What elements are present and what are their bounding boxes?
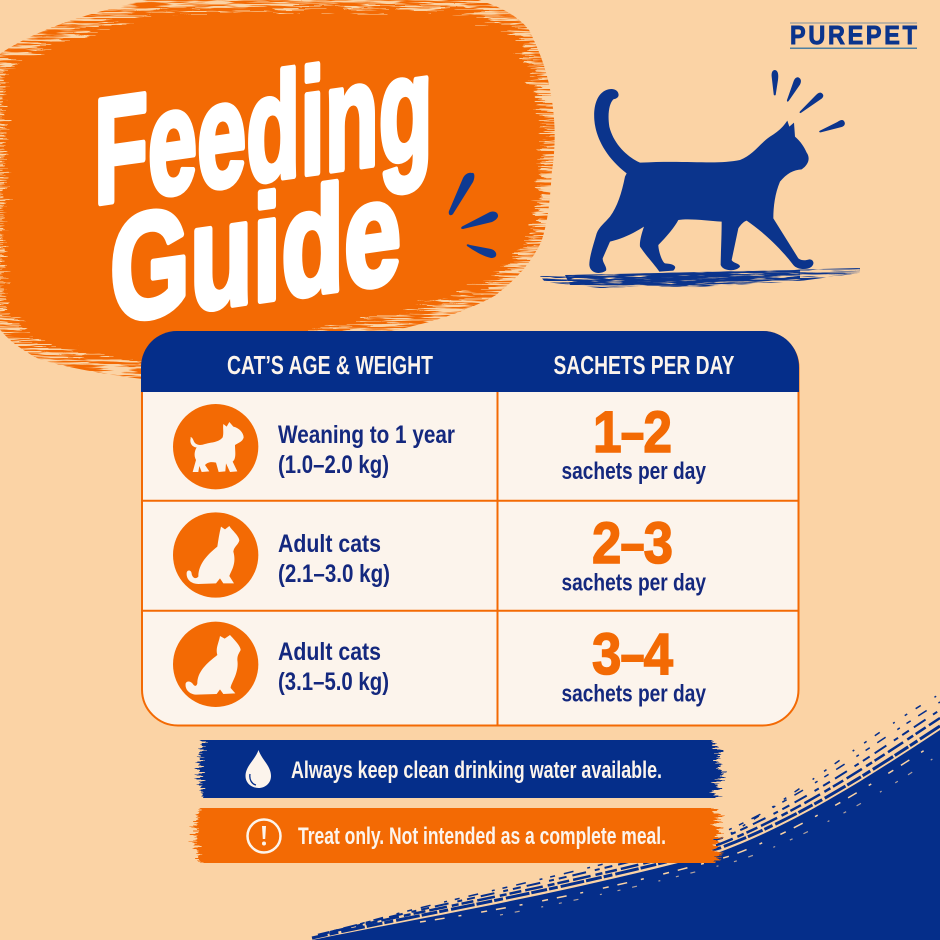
row 3 label: Adult cats — [278, 638, 381, 666]
row 1 weight: (1.0–2.0 kg) — [278, 451, 389, 479]
logo: PUREPET: PUREPET — [790, 22, 917, 50]
row 3 weight: (3.1–5.0 kg) — [278, 668, 389, 696]
icon: walking cat silhouette — [589, 70, 845, 273]
brush stroke: orange title background — [0, 5, 545, 369]
ground scratch under cat — [540, 268, 860, 288]
icon: sitting cat — [173, 512, 258, 598]
banner: treat warning — [196, 808, 718, 863]
row 1 label: Weaning to 1 year — [278, 421, 455, 449]
table body — [142, 332, 798, 726]
icon: kitten — [173, 404, 258, 489]
row 1 amount: 1 — [593, 400, 625, 465]
row 2 label: Adult cats — [278, 530, 381, 558]
table grid lines — [142, 392, 798, 725]
row 2 — [173, 511, 707, 598]
row 3 amount: 4 — [644, 622, 673, 687]
water reminder text: Always keep clean drinking water available. — [291, 757, 662, 784]
row 1 unit: sachets per day — [562, 458, 707, 485]
banner: water reminder — [200, 740, 719, 798]
icon: water drop — [246, 750, 271, 788]
row 2 unit: sachets per day — [562, 570, 707, 596]
brush shape: orange banner — [196, 808, 718, 863]
row 3 unit: sachets per day — [562, 680, 707, 708]
row 3 amount: 3 — [592, 622, 624, 687]
column heading: age and weight: CAT’S AGE & WEIGHT — [227, 350, 433, 380]
brush stroke: navy corner — [312, 694, 940, 940]
title line: Guide: Guide — [110, 145, 401, 354]
icon: large sitting cat — [173, 622, 258, 707]
title — [94, 21, 433, 354]
column heading: sachets: SACHETS PER DAY — [554, 350, 734, 380]
row 3 amount: – — [621, 631, 644, 680]
table header band — [141, 331, 799, 392]
brush shape: navy banner — [200, 740, 719, 798]
icon: motion marks near head — [772, 70, 845, 132]
row 2 amount: 3 — [644, 511, 673, 576]
icon: exclamation circle — [248, 820, 280, 852]
row 1 — [173, 400, 707, 489]
row 2 amount: 2 — [592, 511, 624, 576]
row 3 — [173, 622, 707, 708]
table: feeding guide — [141, 331, 799, 726]
row 1 amount: 2 — [643, 400, 672, 465]
row 1 amount: – — [622, 409, 643, 458]
icon: title accent marks — [449, 173, 498, 258]
treat warning text: Treat only. Not intended as a complete meal. — [298, 823, 666, 850]
row 2 weight: (2.1–3.0 kg) — [278, 560, 390, 588]
row 2 amount: – — [621, 520, 644, 569]
